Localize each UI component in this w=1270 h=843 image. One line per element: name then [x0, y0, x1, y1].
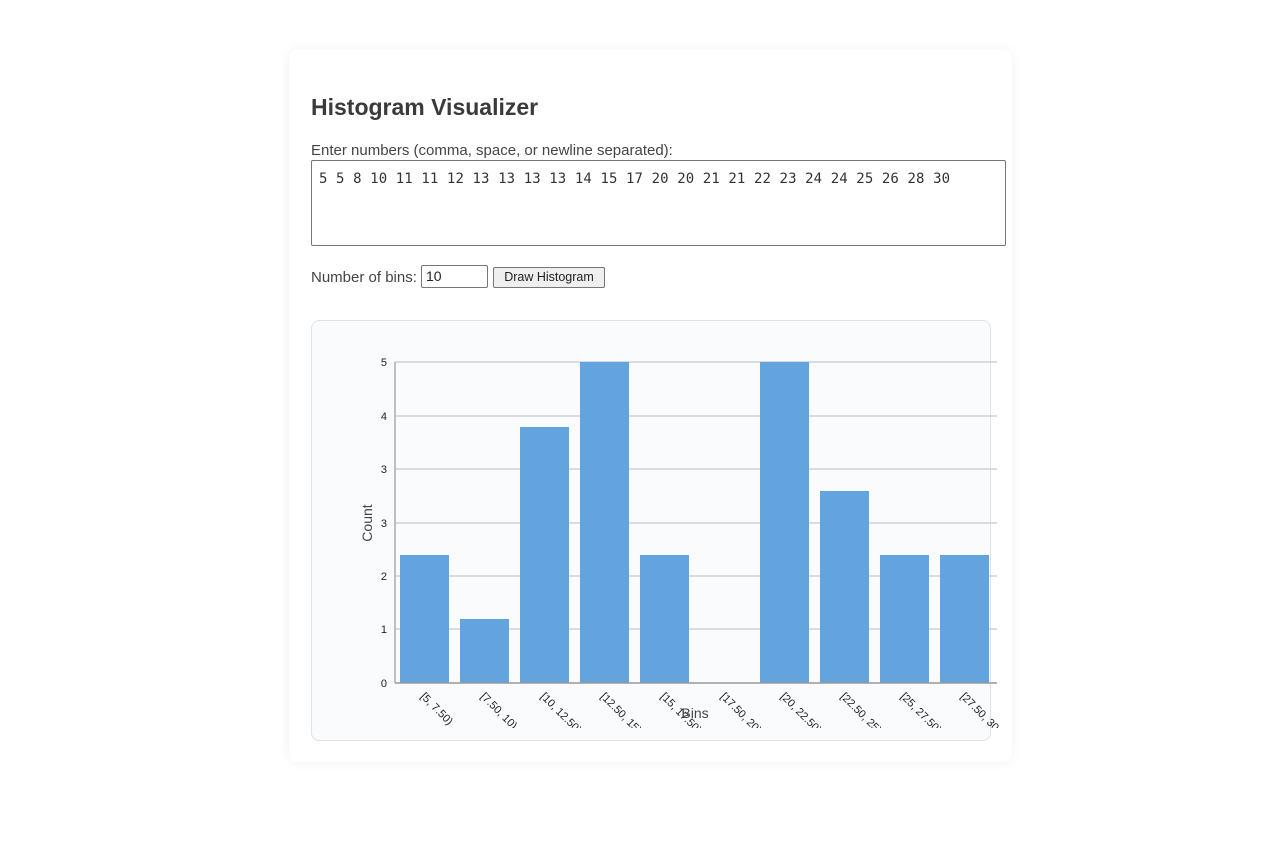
- y axis title: Count: [359, 504, 375, 542]
- y ticks: 3: [381, 518, 387, 530]
- histogram chart: [362, 358, 1000, 728]
- chart panel: [311, 320, 991, 741]
- textarea: [311, 160, 1006, 246]
- x labels: [15, 17.50): [658, 691, 704, 736]
- y ticks: [381, 357, 387, 690]
- x labels: [12.50, 15): [598, 691, 644, 736]
- x labels: [419, 692, 1000, 728]
- card: [289, 50, 1012, 762]
- bars: [400, 362, 989, 683]
- x labels: [27.50, 30]: [958, 691, 1003, 736]
- bins input: 10: [426, 268, 442, 284]
- x labels: [5, 7.50): [418, 691, 455, 728]
- bins control: Number of bins:: [311, 269, 417, 286]
- x labels: [20, 22.50): [778, 691, 824, 736]
- bins input: [421, 265, 488, 288]
- input label: Enter numbers (comma, space, or newline separated):: [311, 142, 673, 159]
- button: [493, 267, 605, 288]
- x labels: [22.50, 25): [838, 691, 884, 736]
- y ticks: 0: [381, 678, 387, 690]
- x axis title: Bins: [681, 705, 709, 721]
- x labels: [10, 12.50): [538, 691, 584, 736]
- x labels: [7.50, 10): [478, 691, 519, 732]
- y ticks: 2: [381, 571, 387, 583]
- y ticks: 1: [381, 624, 387, 636]
- y ticks: 4: [381, 411, 387, 423]
- x labels: [25, 27.50): [898, 691, 944, 736]
- textarea: 5 5 8 10 11 11 12 13 13 13 13 14 15 17 20 20 21 21 22 23 24 24 25 26 28 30: [319, 171, 950, 187]
- bins control: [311, 265, 605, 288]
- y ticks: 5: [381, 357, 387, 369]
- title: Histogram Visualizer: [311, 94, 538, 120]
- button: Draw Histogram: [504, 270, 594, 284]
- x labels: [17.50, 20): [718, 691, 764, 736]
- y ticks: 3: [381, 464, 387, 476]
